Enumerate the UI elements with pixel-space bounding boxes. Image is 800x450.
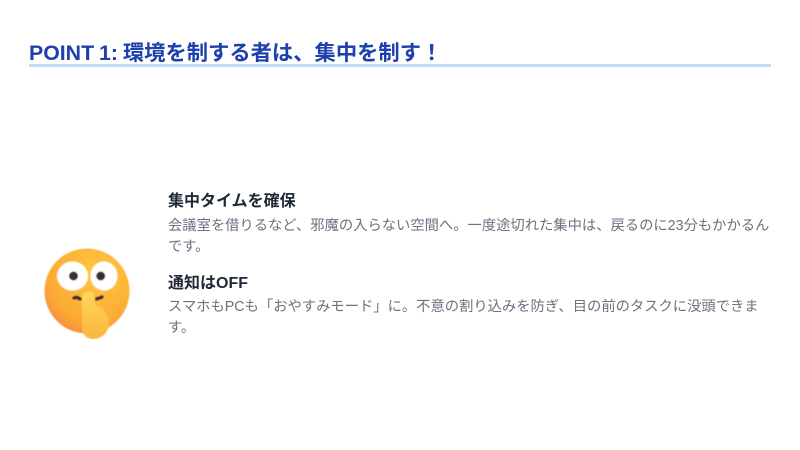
- body: secure focus time: 会議室を借りるなど、邪魔の入らない空間へ。一度途切れた集中は、戻るのに23分もかかるん: [168, 218, 769, 234]
- title: POINT 1: 環境を制する者は、集中を制す！: [29, 41, 442, 65]
- body: secure focus time: [168, 218, 769, 254]
- body: notifications off: す。: [168, 320, 195, 336]
- heading: secure focus time: 集中タイムを確保: [168, 193, 296, 210]
- body: notifications off: [168, 298, 759, 336]
- text block: notifications off: [168, 274, 759, 336]
- title underline: [29, 64, 771, 67]
- body: secure focus time: です。: [168, 238, 209, 254]
- heading: notifications off: 通知はOFF: [168, 275, 248, 292]
- icon: shushing face emoji: [44, 248, 130, 340]
- body: notifications off: スマホもPCも「おやすみモード」に。不意の割り込みを防ぎ、目の前のタスクに没頭できま: [168, 299, 759, 315]
- text block: secure focus time: [168, 192, 769, 254]
